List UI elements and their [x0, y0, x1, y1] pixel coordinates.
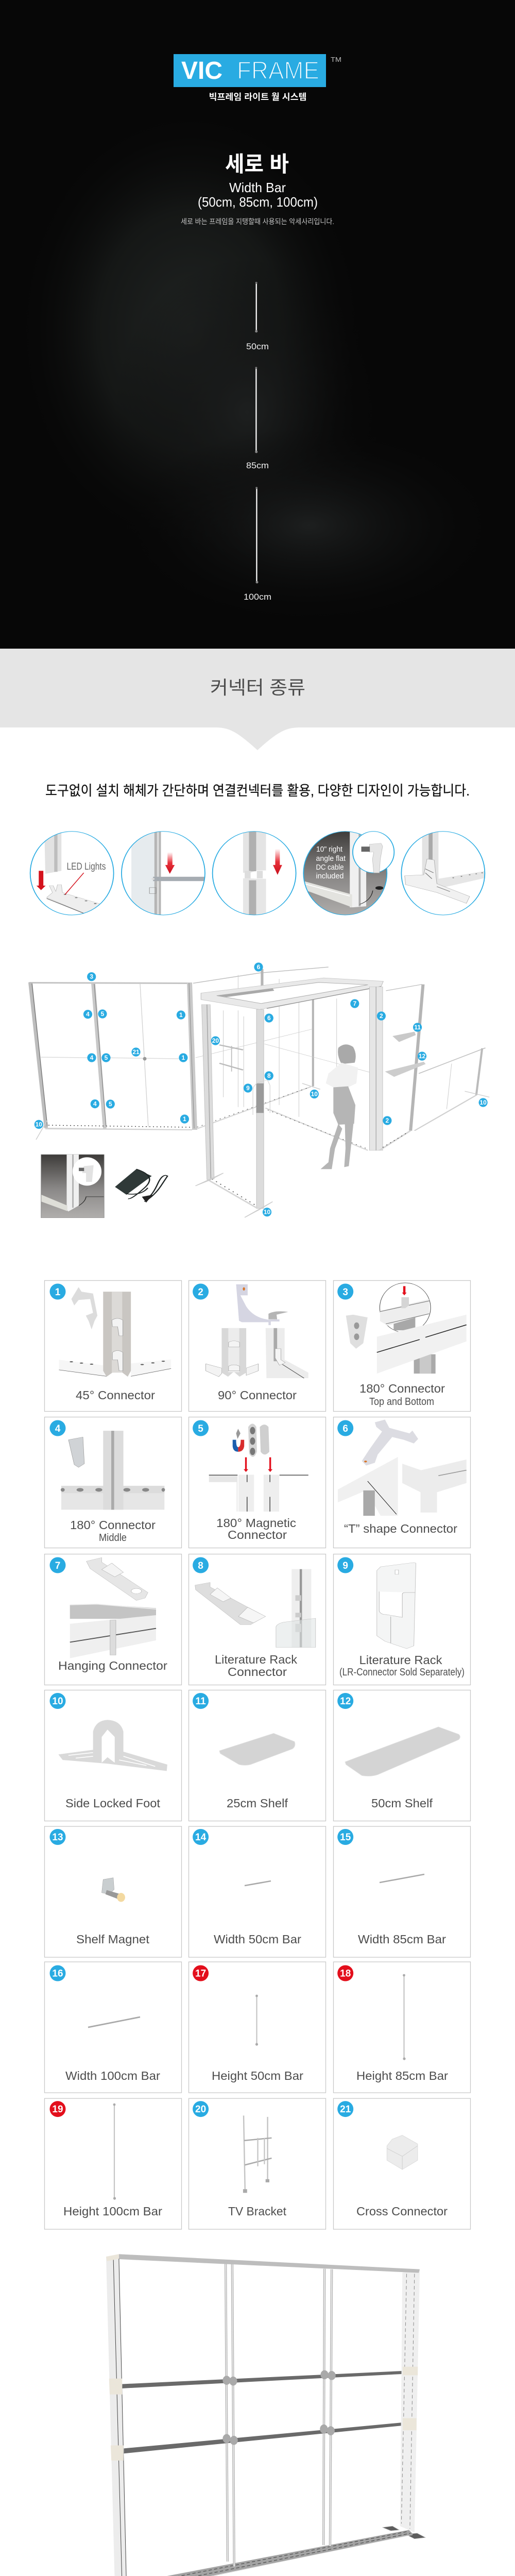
- diagram number badges: 12: [419, 1053, 425, 1060]
- card 1: 45 connector: 1: [55, 1287, 61, 1298]
- diagram number badges: 3: [90, 973, 93, 980]
- circle: DC cable: angle flat: [316, 854, 346, 863]
- cross connectors: [222, 2370, 336, 2445]
- card 12: 50cm shelf: 50cm Shelf: [371, 1797, 433, 1810]
- card 2: 90 connector: [188, 1281, 325, 1412]
- card 10: side locked foot: 10: [52, 1696, 63, 1707]
- card 20: TV bracket: [188, 2098, 325, 2229]
- diagram number badges: 10: [311, 1090, 318, 1097]
- card 18: height 85cm bar: [334, 1962, 471, 2093]
- subtitle: width bar sizes: Width Bar: [229, 180, 286, 195]
- card 18: height 85cm bar: Height 85cm Bar: [356, 2069, 448, 2082]
- TV bracket: [219, 1045, 243, 1072]
- bar 100cm: [244, 487, 271, 602]
- card 16: width 100cm bar: 16: [52, 1968, 63, 1979]
- card 6: T shape connector: 6: [342, 1423, 348, 1434]
- diagram number badges: 4: [86, 1011, 90, 1018]
- card 4: 180 connector middle: 4: [55, 1423, 61, 1434]
- diagram number badges: 11: [414, 1024, 421, 1031]
- card 6: T shape connector: “T” shape Connector: [344, 1522, 457, 1535]
- circle: bar insertion: [122, 829, 205, 916]
- diagram number badges: 4: [90, 1054, 94, 1061]
- card 9: literature rack: [334, 1554, 471, 1685]
- brand subtitle: 빅프레임 라이트 월 시스템: [209, 92, 307, 102]
- right post: [400, 2270, 420, 2533]
- card 7: hanging connector: 7: [55, 1561, 60, 1571]
- card 18: height 85cm bar: 18: [340, 1968, 351, 1979]
- diagram number badges: 6: [267, 1014, 271, 1022]
- card 19: height 100cm bar: 19: [52, 2104, 63, 2115]
- card 11: 25cm shelf: 25cm Shelf: [227, 1797, 288, 1810]
- card 14: width 50cm bar: 14: [195, 1832, 207, 1843]
- card 17: height 50cm bar: Height 50cm Bar: [212, 2069, 303, 2082]
- diagram number badges: 9: [246, 1084, 250, 1092]
- card 21: cross connector: [334, 2098, 471, 2229]
- circle: DC cable: included: [316, 872, 344, 880]
- card 7: hanging connector: Hanging Connector: [58, 1659, 167, 1672]
- card 17: height 50cm bar: 17: [195, 1968, 206, 1979]
- card 13: shelf magnet: [44, 1826, 181, 1957]
- card 11: 25cm shelf: 11: [196, 1696, 206, 1707]
- circle: bar joint: [213, 829, 296, 917]
- bar 85cm: 85cm: [246, 461, 269, 470]
- card 15: width 85cm bar: [334, 1826, 471, 1957]
- circle: LED lights: [30, 829, 114, 915]
- diagram frames: [193, 967, 489, 1217]
- card 14: width 50cm bar: Width 50cm Bar: [214, 1933, 301, 1946]
- logo: TM: [331, 56, 341, 63]
- diagram number badges: [35, 962, 488, 1216]
- diagram number badges: 10: [479, 1099, 487, 1106]
- heading: 커넥터 종류: [210, 677, 305, 698]
- card 14: width 50cm bar: [188, 1826, 325, 1957]
- card 16: width 100cm bar: [44, 1962, 181, 2093]
- card 10: side locked foot: Side Locked Foot: [65, 1797, 161, 1810]
- bottom frame render: [106, 2254, 425, 2576]
- intro sentence: 도구없이 설치 해체가 간단하며 연결컨넥터를 활용, 다양한 디자인이 가능합니다.: [45, 783, 470, 799]
- card 1: 45 connector: 45° Connector: [76, 1388, 155, 1402]
- panel: parts grid: [44, 1281, 471, 2229]
- diagram number badges: 20: [212, 1037, 219, 1044]
- panel: dark hero: [0, 0, 515, 649]
- bar 100cm: 100cm: [244, 592, 271, 602]
- diagram number badges: 10: [264, 1209, 270, 1216]
- diagram number badges: 10: [36, 1121, 42, 1128]
- circle: DC cable: 10" right: [316, 845, 343, 854]
- subtitle: width bar sizes: [198, 180, 318, 210]
- card 9: literature rack: 9: [342, 1561, 348, 1571]
- power adapter: [115, 1169, 167, 1202]
- card 4: 180 connector middle: [44, 1417, 181, 1548]
- logo: [174, 54, 341, 87]
- card 13: shelf magnet: Shelf Magnet: [76, 1933, 150, 1946]
- right walls and shelves: [302, 985, 489, 1150]
- card 21: cross connector: Cross Connector: [356, 2205, 448, 2218]
- card 12: 50cm shelf: [334, 1690, 471, 1821]
- card 19: height 100cm bar: [44, 2098, 181, 2229]
- description: 세로 바는 프레임을 지탱할때 사용되는 악세사리입니다.: [181, 217, 334, 226]
- card 5: magnetic connector: Connector: [228, 1528, 287, 1541]
- card 19: height 100cm bar: Height 100cm Bar: [63, 2205, 162, 2218]
- card 15: width 85cm bar: Width 85cm Bar: [358, 1933, 446, 1946]
- card 10: side locked foot: [44, 1690, 181, 1821]
- horizontal bars: [122, 2370, 412, 2453]
- card 5: magnetic connector: [188, 1417, 325, 1548]
- card 3: 180 connector top and bottom: 180° Connector: [359, 1382, 445, 1395]
- card 17: height 50cm bar: [188, 1962, 325, 2093]
- card 5: magnetic connector: 5: [198, 1423, 203, 1434]
- panel: feature circles: [30, 829, 486, 917]
- base rail: [127, 2530, 413, 2576]
- circle: DC cable: [302, 831, 394, 917]
- card 5: magnetic connector: 180° Magnetic: [216, 1516, 296, 1530]
- card 4: 180 connector middle: 180° Connector: [70, 1518, 156, 1532]
- bar 85cm: [246, 367, 269, 470]
- back walls: [193, 967, 373, 1150]
- feet: [107, 2526, 425, 2576]
- card 8: literature rack connector: Literature Rack: [215, 1653, 298, 1666]
- logo: FRAME: [237, 57, 319, 84]
- vertical rods: [226, 2264, 332, 2567]
- left post: [106, 2254, 127, 2576]
- card 9: literature rack: (LR-Connector Sold Separately): [339, 1667, 465, 1678]
- diagram number badges: 1: [179, 1011, 183, 1019]
- card 13: shelf magnet: 13: [52, 1832, 63, 1843]
- card 11: 25cm shelf: [188, 1690, 325, 1821]
- card 20: TV bracket: TV Bracket: [228, 2205, 287, 2218]
- diagram number badges: 1: [182, 1054, 185, 1061]
- card 7: hanging connector: [44, 1554, 181, 1685]
- diagram number badges: 5: [105, 1054, 108, 1061]
- diagram number badges: 1: [183, 1115, 186, 1123]
- diagram number badges: 21: [132, 1048, 140, 1056]
- subtitle: width bar sizes: (50cm, 85cm, 100cm): [198, 194, 318, 210]
- diagram number badges: 4: [93, 1100, 97, 1108]
- card 1: 45 connector: [44, 1281, 181, 1412]
- bar 50cm: [246, 282, 269, 351]
- diagram number badges: 6: [257, 963, 261, 971]
- card 8: literature rack connector: Connector: [228, 1665, 287, 1679]
- top rail: [119, 2254, 420, 2273]
- person silhouette: [320, 1044, 358, 1169]
- diagram number badges: 2: [386, 1117, 389, 1124]
- left wall: [28, 982, 197, 1140]
- circle: foot: [401, 829, 486, 915]
- bar 50cm: 50cm: [246, 342, 269, 351]
- diagram number badges: 7: [353, 1000, 356, 1007]
- card 9: literature rack: Literature Rack: [359, 1653, 442, 1667]
- card 3: 180 connector top and bottom: Top and Bottom: [369, 1396, 434, 1408]
- card 8: literature rack connector: 8: [198, 1561, 203, 1571]
- card 3: 180 connector top and bottom: 3: [342, 1287, 348, 1298]
- panel: assembly diagram: [28, 962, 489, 1218]
- card 15: width 85cm bar: 15: [340, 1832, 351, 1843]
- card 6: T shape connector: [334, 1417, 471, 1548]
- title: 세로 바: [225, 152, 289, 176]
- diagram number badges: 5: [109, 1100, 112, 1108]
- diagram number badges: 8: [267, 1072, 271, 1079]
- card 4: 180 connector middle: Middle: [99, 1532, 127, 1544]
- canopy and door posts: [195, 978, 383, 1217]
- card 20: TV bracket: 20: [195, 2104, 206, 2115]
- circle: LED lights: LED Lights: [67, 861, 106, 872]
- inset photo: DC connection: [41, 1155, 104, 1218]
- card 2: 90 connector: 90° Connector: [218, 1388, 297, 1402]
- diagram number badges: 2: [380, 1012, 383, 1020]
- circle: DC cable: DC cable: [316, 863, 344, 872]
- card 2: 90 connector: 2: [198, 1287, 203, 1298]
- card 21: cross connector: 21: [340, 2104, 351, 2115]
- section heading banner: [0, 649, 515, 750]
- card 12: 50cm shelf: 12: [340, 1696, 351, 1707]
- card 16: width 100cm bar: Width 100cm Bar: [65, 2069, 160, 2082]
- diagram number badges: 5: [101, 1010, 105, 1018]
- logo: VIC: [181, 57, 222, 84]
- card 8: literature rack connector: [188, 1554, 325, 1685]
- card 3: 180 connector top and bottom: [334, 1281, 471, 1412]
